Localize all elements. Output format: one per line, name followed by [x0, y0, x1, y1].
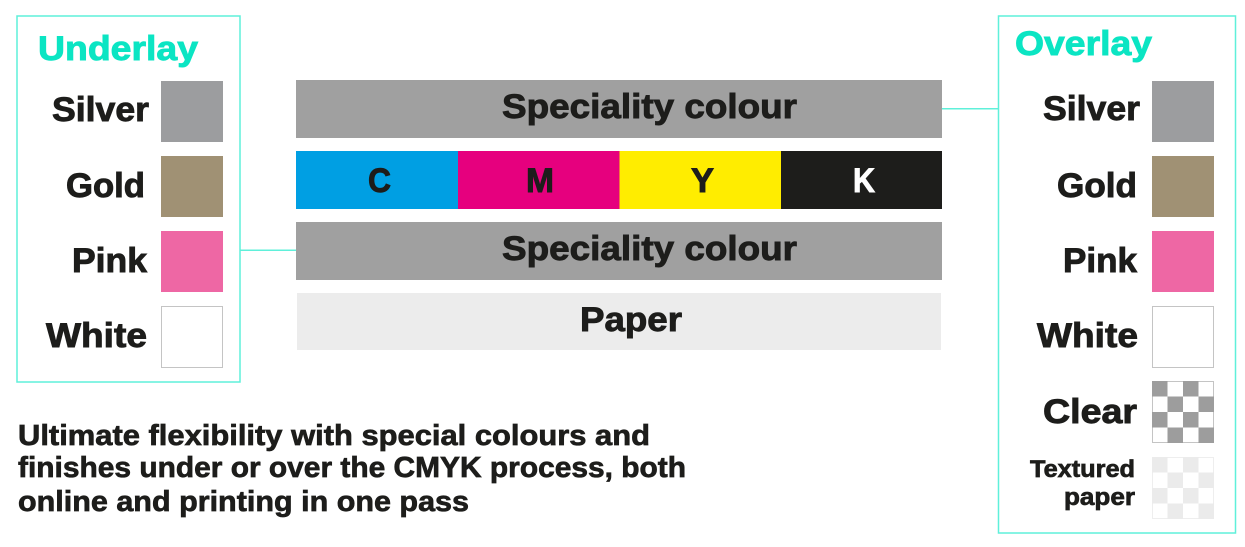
label: gold: Gold — [1057, 167, 1137, 205]
layer: top speciality colour — [296, 80, 942, 138]
label: pink: Pink — [72, 242, 147, 280]
label: gold: Gold — [66, 167, 145, 205]
cyan: C — [368, 162, 391, 200]
yellow: Y — [691, 162, 714, 200]
swatch: textured paper checkerboard — [1152, 457, 1214, 519]
black — [781, 151, 942, 209]
label: textured paper: Textured — [1030, 456, 1135, 483]
swatch: pink — [1152, 231, 1214, 292]
swatch: white — [1152, 306, 1214, 368]
label: white: White — [1037, 317, 1138, 355]
text block: description: finishes under or over the CMYK process, both — [18, 452, 686, 484]
label: textured paper: paper — [1064, 484, 1135, 511]
cyan — [296, 151, 458, 209]
label: silver: Silver — [1043, 90, 1140, 128]
panel: overlay — [998, 16, 1236, 533]
connector: overlay to speciality colour — [942, 108, 999, 110]
layer: top speciality colour: Speciality colour — [502, 88, 797, 126]
text block: description — [18, 420, 686, 518]
swatch: pink — [161, 231, 223, 292]
panel: underlay — [17, 16, 240, 382]
label: white: White — [46, 317, 147, 355]
swatch: clear checkerboard — [1152, 381, 1214, 443]
magenta: M — [526, 162, 554, 200]
black: K — [853, 162, 875, 200]
yellow — [620, 151, 781, 209]
layer: paper — [297, 293, 941, 350]
swatch: silver — [161, 81, 223, 142]
text block: description: online and printing in one pass — [18, 486, 469, 518]
heading: underlay: Underlay — [38, 30, 198, 68]
label: silver: Silver — [52, 91, 149, 129]
swatch: silver — [1152, 81, 1214, 142]
label: clear: Clear — [1043, 393, 1137, 431]
heading: overlay: Overlay — [1015, 25, 1152, 63]
label: textured paper — [1030, 456, 1135, 511]
layer: bottom speciality colour: Speciality colour — [502, 230, 797, 268]
swatch: gold — [1152, 156, 1214, 217]
swatch: white — [162, 306, 222, 368]
swatch: gold — [161, 156, 223, 217]
connector: underlay to speciality colour — [240, 250, 296, 251]
layer: paper: Paper — [580, 301, 682, 339]
layer: bottom speciality colour — [296, 222, 942, 280]
layer: CMYK process — [296, 151, 942, 209]
magenta — [458, 151, 620, 209]
text block: description: Ultimate flexibility with special colours and — [18, 420, 650, 452]
label: pink: Pink — [1063, 242, 1137, 280]
